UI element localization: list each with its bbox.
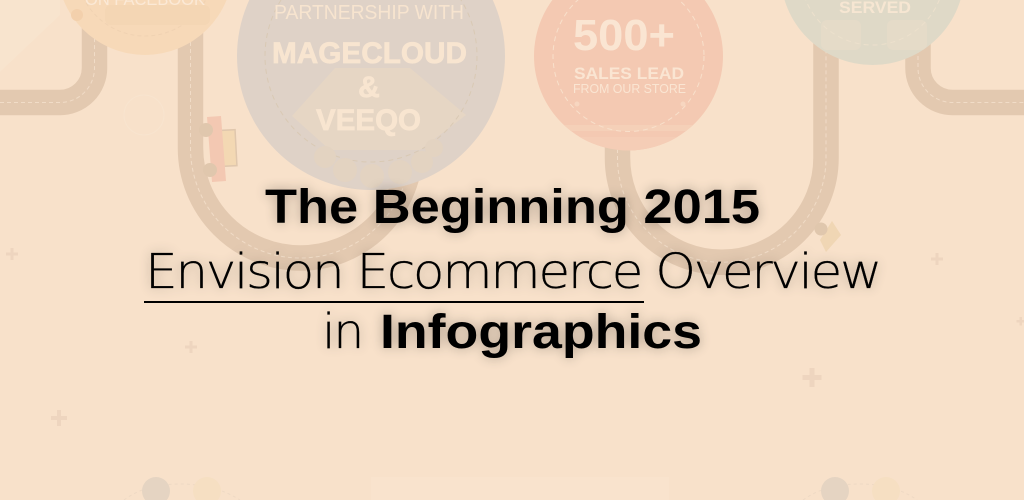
background corner shape [0, 0, 60, 72]
bottom dots: right [803, 477, 917, 500]
title underline [144, 301, 644, 303]
text: partnership with: PARTNERSHIP WITH [274, 2, 464, 24]
text: magecloud: MAGECLOUD [272, 37, 467, 70]
title line 2: Envision Ecommerce Overview [145, 244, 880, 300]
text: sales lead: SALES LEAD [574, 64, 684, 83]
title line 1: The Beginning 2015 [265, 181, 760, 234]
circle: sales lead [534, 0, 723, 151]
text: veeqo: VEEQO [316, 104, 421, 137]
faint circle outline [124, 95, 164, 135]
road: far right [918, 0, 1024, 102]
text: 500+: 500+ [573, 11, 675, 60]
road: far left [0, 0, 94, 102]
text: ampersand: & [358, 71, 380, 104]
decorative plus signs [6, 248, 1024, 426]
circle: partnership [237, 0, 505, 190]
icon: toy car on right road [814, 221, 841, 252]
circle: served [780, 0, 964, 65]
title line 3: in [322, 304, 362, 360]
bottom panel [371, 477, 669, 500]
bottom dots: left [124, 477, 240, 500]
icon: toy car on left road [199, 116, 237, 182]
title [144, 181, 880, 360]
circle: facebook [57, 0, 233, 55]
title line 3: Infographics [380, 306, 702, 359]
text: from our store: FROM OUR STORE [573, 82, 686, 96]
road: right U-turn [618, 0, 826, 262]
road: left U-turn [190, 0, 410, 258]
